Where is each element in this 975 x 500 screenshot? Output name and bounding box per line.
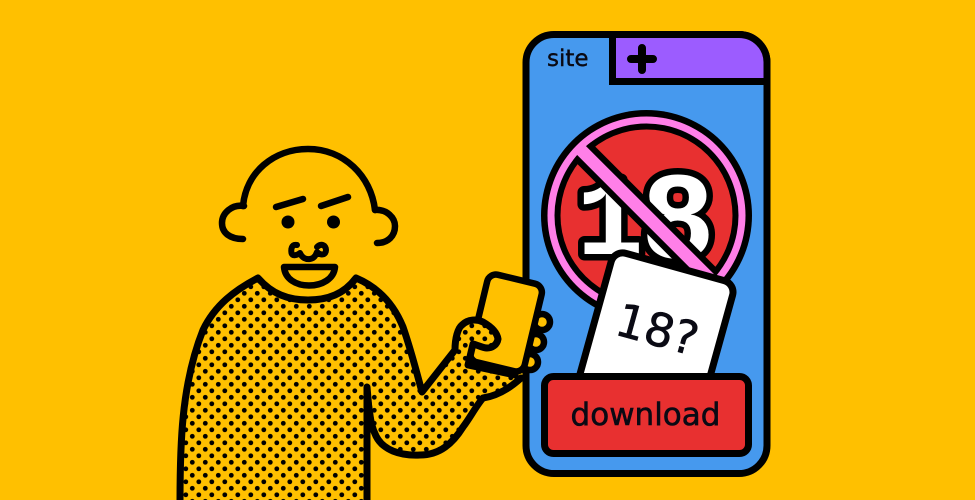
tab label: site: site	[547, 46, 589, 72]
button label: download	[571, 397, 720, 433]
diagonal slash	[573, 142, 720, 275]
eyes	[282, 216, 340, 228]
icon: prohibited 18 sign	[541, 110, 752, 321]
new tab panel	[612, 34, 767, 82]
illustration: person checking age gate on phone	[176, 31, 770, 500]
small phone in hand	[468, 273, 544, 373]
fingers behind phone	[522, 314, 550, 370]
numeral 8: 8	[641, 156, 715, 296]
numeral 1: 1	[576, 161, 644, 288]
arm crease taper	[365, 385, 375, 430]
download button	[544, 376, 748, 454]
nose	[291, 245, 326, 259]
sweater fill	[180, 278, 521, 500]
sweater dots	[180, 278, 521, 500]
head	[243, 149, 375, 210]
card shape	[576, 249, 736, 373]
left ear	[222, 206, 244, 239]
sweater outline	[180, 278, 521, 500]
mouth	[284, 267, 335, 286]
icon: plus	[631, 48, 653, 70]
eyebrows	[276, 197, 348, 207]
button shape	[544, 376, 748, 454]
figure: man	[180, 149, 550, 500]
right ear	[375, 210, 395, 243]
panel: browser phone screen	[526, 34, 767, 486]
sign ring	[541, 110, 752, 321]
sweater with arm and hand	[180, 278, 521, 500]
phone body	[526, 34, 767, 474]
card text: 18?	[610, 292, 704, 367]
age question card	[576, 249, 736, 373]
